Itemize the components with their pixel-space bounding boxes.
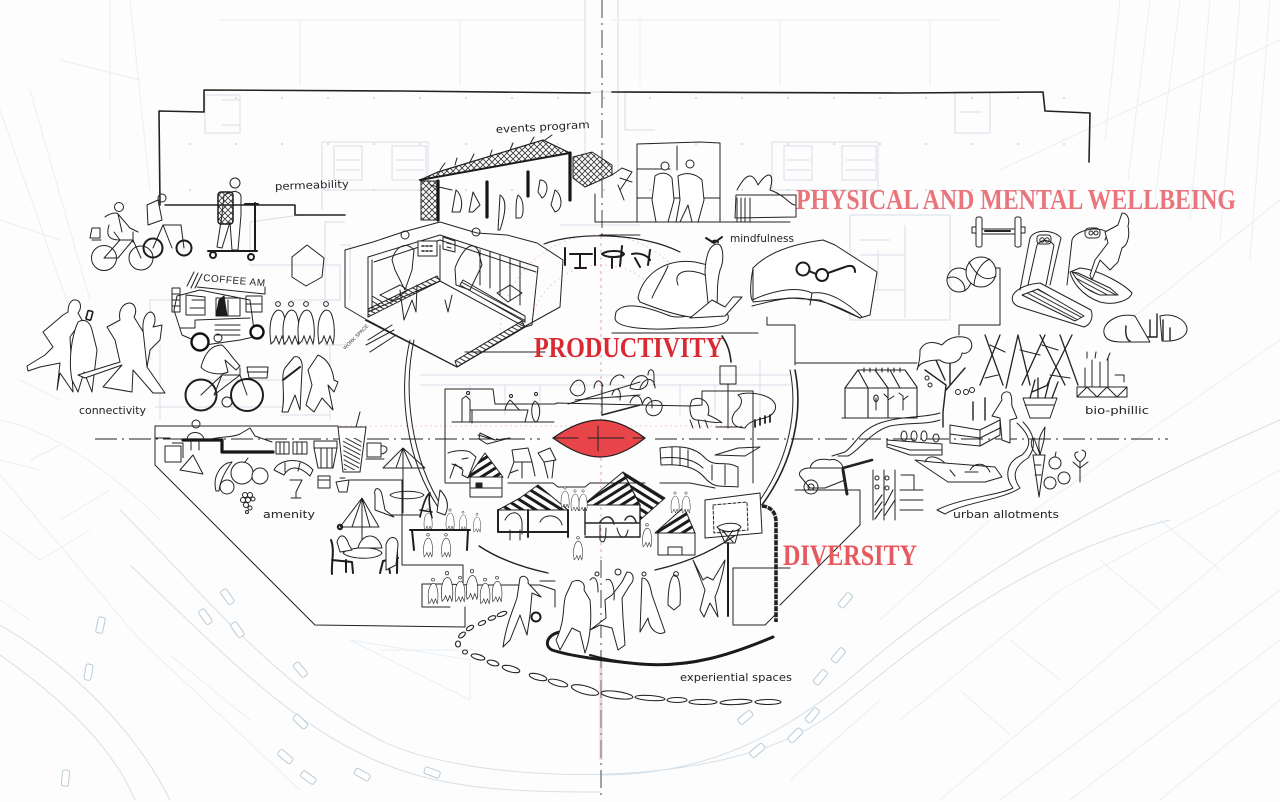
apples and flower <box>1044 450 1088 489</box>
dark chairs <box>331 493 432 574</box>
roof plants <box>440 135 552 170</box>
bookshelf wave <box>660 447 738 487</box>
bleachers crowd <box>422 570 555 607</box>
plant end <box>612 168 632 200</box>
panel: bicycles and scooter <box>90 178 324 286</box>
large figures <box>503 560 725 653</box>
small box <box>318 476 330 488</box>
faint building plan blocks <box>150 0 990 420</box>
panel: central plaza room <box>445 366 776 488</box>
label: permeability: permeability <box>275 178 349 193</box>
ball <box>532 612 540 622</box>
counter <box>155 426 338 438</box>
panel: amenity food row <box>155 412 387 514</box>
beam <box>420 153 570 180</box>
bucket <box>314 441 337 468</box>
wall screens <box>418 237 520 305</box>
planter <box>1077 352 1127 397</box>
thick post <box>762 506 776 622</box>
panel: mindfulness figure <box>612 237 758 333</box>
stall 2 <box>498 485 568 540</box>
small text note: WORK SPACE <box>342 323 371 351</box>
market stalls <box>468 453 695 560</box>
stones <box>1104 314 1187 342</box>
wheels <box>192 334 208 350</box>
garden paths <box>832 413 1033 514</box>
coffee sign: COFFEE AM <box>203 273 265 289</box>
stepping stones <box>456 610 781 705</box>
balls <box>947 257 996 292</box>
head <box>705 244 723 303</box>
sun lounger <box>478 433 510 444</box>
audience group <box>568 370 662 416</box>
lamp and lounge chairs <box>690 366 776 428</box>
posts <box>438 153 570 220</box>
backboard <box>705 493 762 538</box>
pole <box>727 543 729 616</box>
stencil text: productivity: PRODUCTIVITY <box>534 332 723 364</box>
cyclist with basket <box>186 334 338 412</box>
runners <box>27 300 165 393</box>
side lattice <box>421 181 438 220</box>
label: bio-phillic: bio-phillic <box>1085 405 1149 417</box>
round table <box>390 491 424 515</box>
pedestrians <box>282 357 302 412</box>
panel: events program pavilion <box>420 135 632 230</box>
raised beds <box>950 398 1000 446</box>
steps <box>366 325 396 352</box>
bread <box>165 443 183 462</box>
treadmill runner <box>1090 213 1129 280</box>
red lens <box>553 420 645 457</box>
label: amenity: amenity <box>263 509 315 521</box>
spare baskets <box>172 288 262 312</box>
awning <box>187 272 265 294</box>
pints <box>276 442 307 454</box>
long table people <box>424 509 481 557</box>
umbrella small <box>340 498 379 545</box>
panel: book and glasses <box>751 240 877 318</box>
hoop and net <box>717 523 741 543</box>
floor line <box>612 332 758 334</box>
teepee frames <box>980 335 1078 388</box>
faint cars <box>61 588 853 786</box>
walls <box>368 235 538 327</box>
cyclist one <box>90 202 153 270</box>
thick ground curve <box>547 632 773 665</box>
wheelbarrow <box>799 459 872 494</box>
croissant <box>274 461 313 476</box>
cup cake <box>336 478 349 492</box>
cafe seated figures <box>337 489 447 570</box>
cafe area <box>331 448 481 574</box>
room outline <box>445 389 753 488</box>
panel: bench couple <box>637 142 796 222</box>
frame <box>637 142 720 222</box>
small chairs <box>448 448 556 478</box>
truck body <box>174 290 262 345</box>
rough section outline <box>345 222 563 367</box>
label: urban allotments: urban allotments <box>953 509 1059 521</box>
pavilion people <box>430 180 561 230</box>
legs <box>615 306 728 329</box>
lens crosshair <box>553 426 645 451</box>
long table <box>410 530 470 550</box>
fruit <box>215 458 268 494</box>
glasses <box>796 262 855 281</box>
panel: isometric workspace <box>342 222 563 367</box>
counter person <box>187 432 204 450</box>
hatched band <box>455 321 525 367</box>
panel: biophilic garden <box>799 335 1127 520</box>
coffee truck <box>172 272 334 350</box>
laptop <box>690 297 742 318</box>
planting <box>735 175 796 222</box>
experiential spaces section <box>422 560 781 705</box>
market people <box>561 487 690 560</box>
tree <box>917 337 974 427</box>
treadmill two <box>1067 228 1132 303</box>
cafe table <box>343 548 382 558</box>
floor front edge <box>365 320 525 367</box>
mug <box>366 443 387 459</box>
umbrella <box>383 448 425 512</box>
body <box>638 261 718 317</box>
large cup <box>338 412 366 472</box>
basketball hoop <box>705 493 776 622</box>
label: experiential spaces: experiential spaces <box>680 672 792 684</box>
backpack <box>218 192 233 224</box>
floating book <box>715 447 760 456</box>
label: events program: events program <box>496 119 590 136</box>
cyclist two <box>144 194 192 258</box>
scooter rider <box>208 178 258 260</box>
grapes <box>240 492 255 514</box>
hexagon <box>292 245 324 286</box>
treadmill one <box>1012 231 1092 327</box>
roof <box>420 140 570 180</box>
food scribbles <box>208 428 272 442</box>
hatched veg strip <box>873 470 923 520</box>
sandwich <box>180 455 203 474</box>
queue <box>270 302 334 344</box>
small heads <box>590 569 678 600</box>
building and site outline <box>155 90 1090 627</box>
bench and workers <box>452 392 554 423</box>
greenhouse <box>842 368 917 418</box>
book <box>753 240 877 318</box>
desks <box>372 285 522 306</box>
faint red centre rings <box>160 235 760 426</box>
carrot <box>1031 427 1045 497</box>
panel: gym equipment <box>947 213 1187 342</box>
panel: meeting tables <box>565 246 650 268</box>
small tent stall <box>655 507 695 555</box>
pot <box>1023 378 1058 418</box>
dark counter edge <box>183 440 273 452</box>
central arc around plaza <box>405 236 798 573</box>
gardener <box>992 392 1017 443</box>
faint roads <box>0 420 1280 800</box>
label: mindfulness: mindfulness <box>730 233 794 245</box>
stall 3 <box>583 472 665 542</box>
workspace figures <box>392 228 482 320</box>
stall 1 <box>468 453 503 497</box>
label: connectivity: connectivity <box>79 405 146 417</box>
couple <box>652 173 704 222</box>
stencil text: diversity: DIVERSITY <box>783 539 917 572</box>
wine glass <box>290 480 302 498</box>
driver <box>216 296 227 316</box>
truck details <box>180 295 250 335</box>
barbell <box>972 217 1025 247</box>
